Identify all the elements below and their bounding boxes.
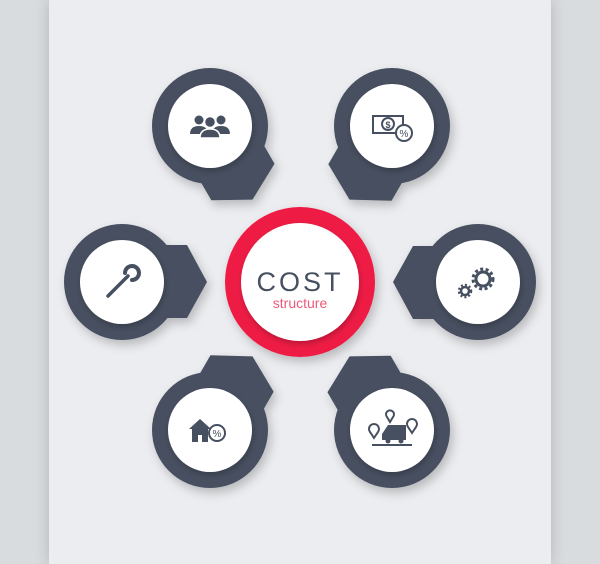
node: house with percent (bottom-left) <box>152 338 284 488</box>
node: wrench (left) <box>64 224 207 340</box>
icon: wrench <box>108 266 139 296</box>
center: cost structure <box>225 207 375 357</box>
icon: banknote with percent <box>373 116 412 141</box>
icon: house percent <box>189 419 211 442</box>
icon: gears <box>459 269 493 297</box>
node: money (top-right) <box>318 68 450 218</box>
node: house with percent (bottom-left): % <box>213 429 222 440</box>
subtitle text: structure <box>273 295 327 311</box>
node: delivery route (bottom-right) <box>317 338 450 488</box>
icon: van with pins <box>382 425 406 444</box>
title text: COST <box>256 267 344 297</box>
node: money (top-right): $ <box>385 120 391 130</box>
icon: people <box>190 116 230 138</box>
node: gears (right) <box>393 224 536 340</box>
node: money (top-right): % <box>400 129 409 140</box>
node: people (top-left) <box>152 68 285 218</box>
